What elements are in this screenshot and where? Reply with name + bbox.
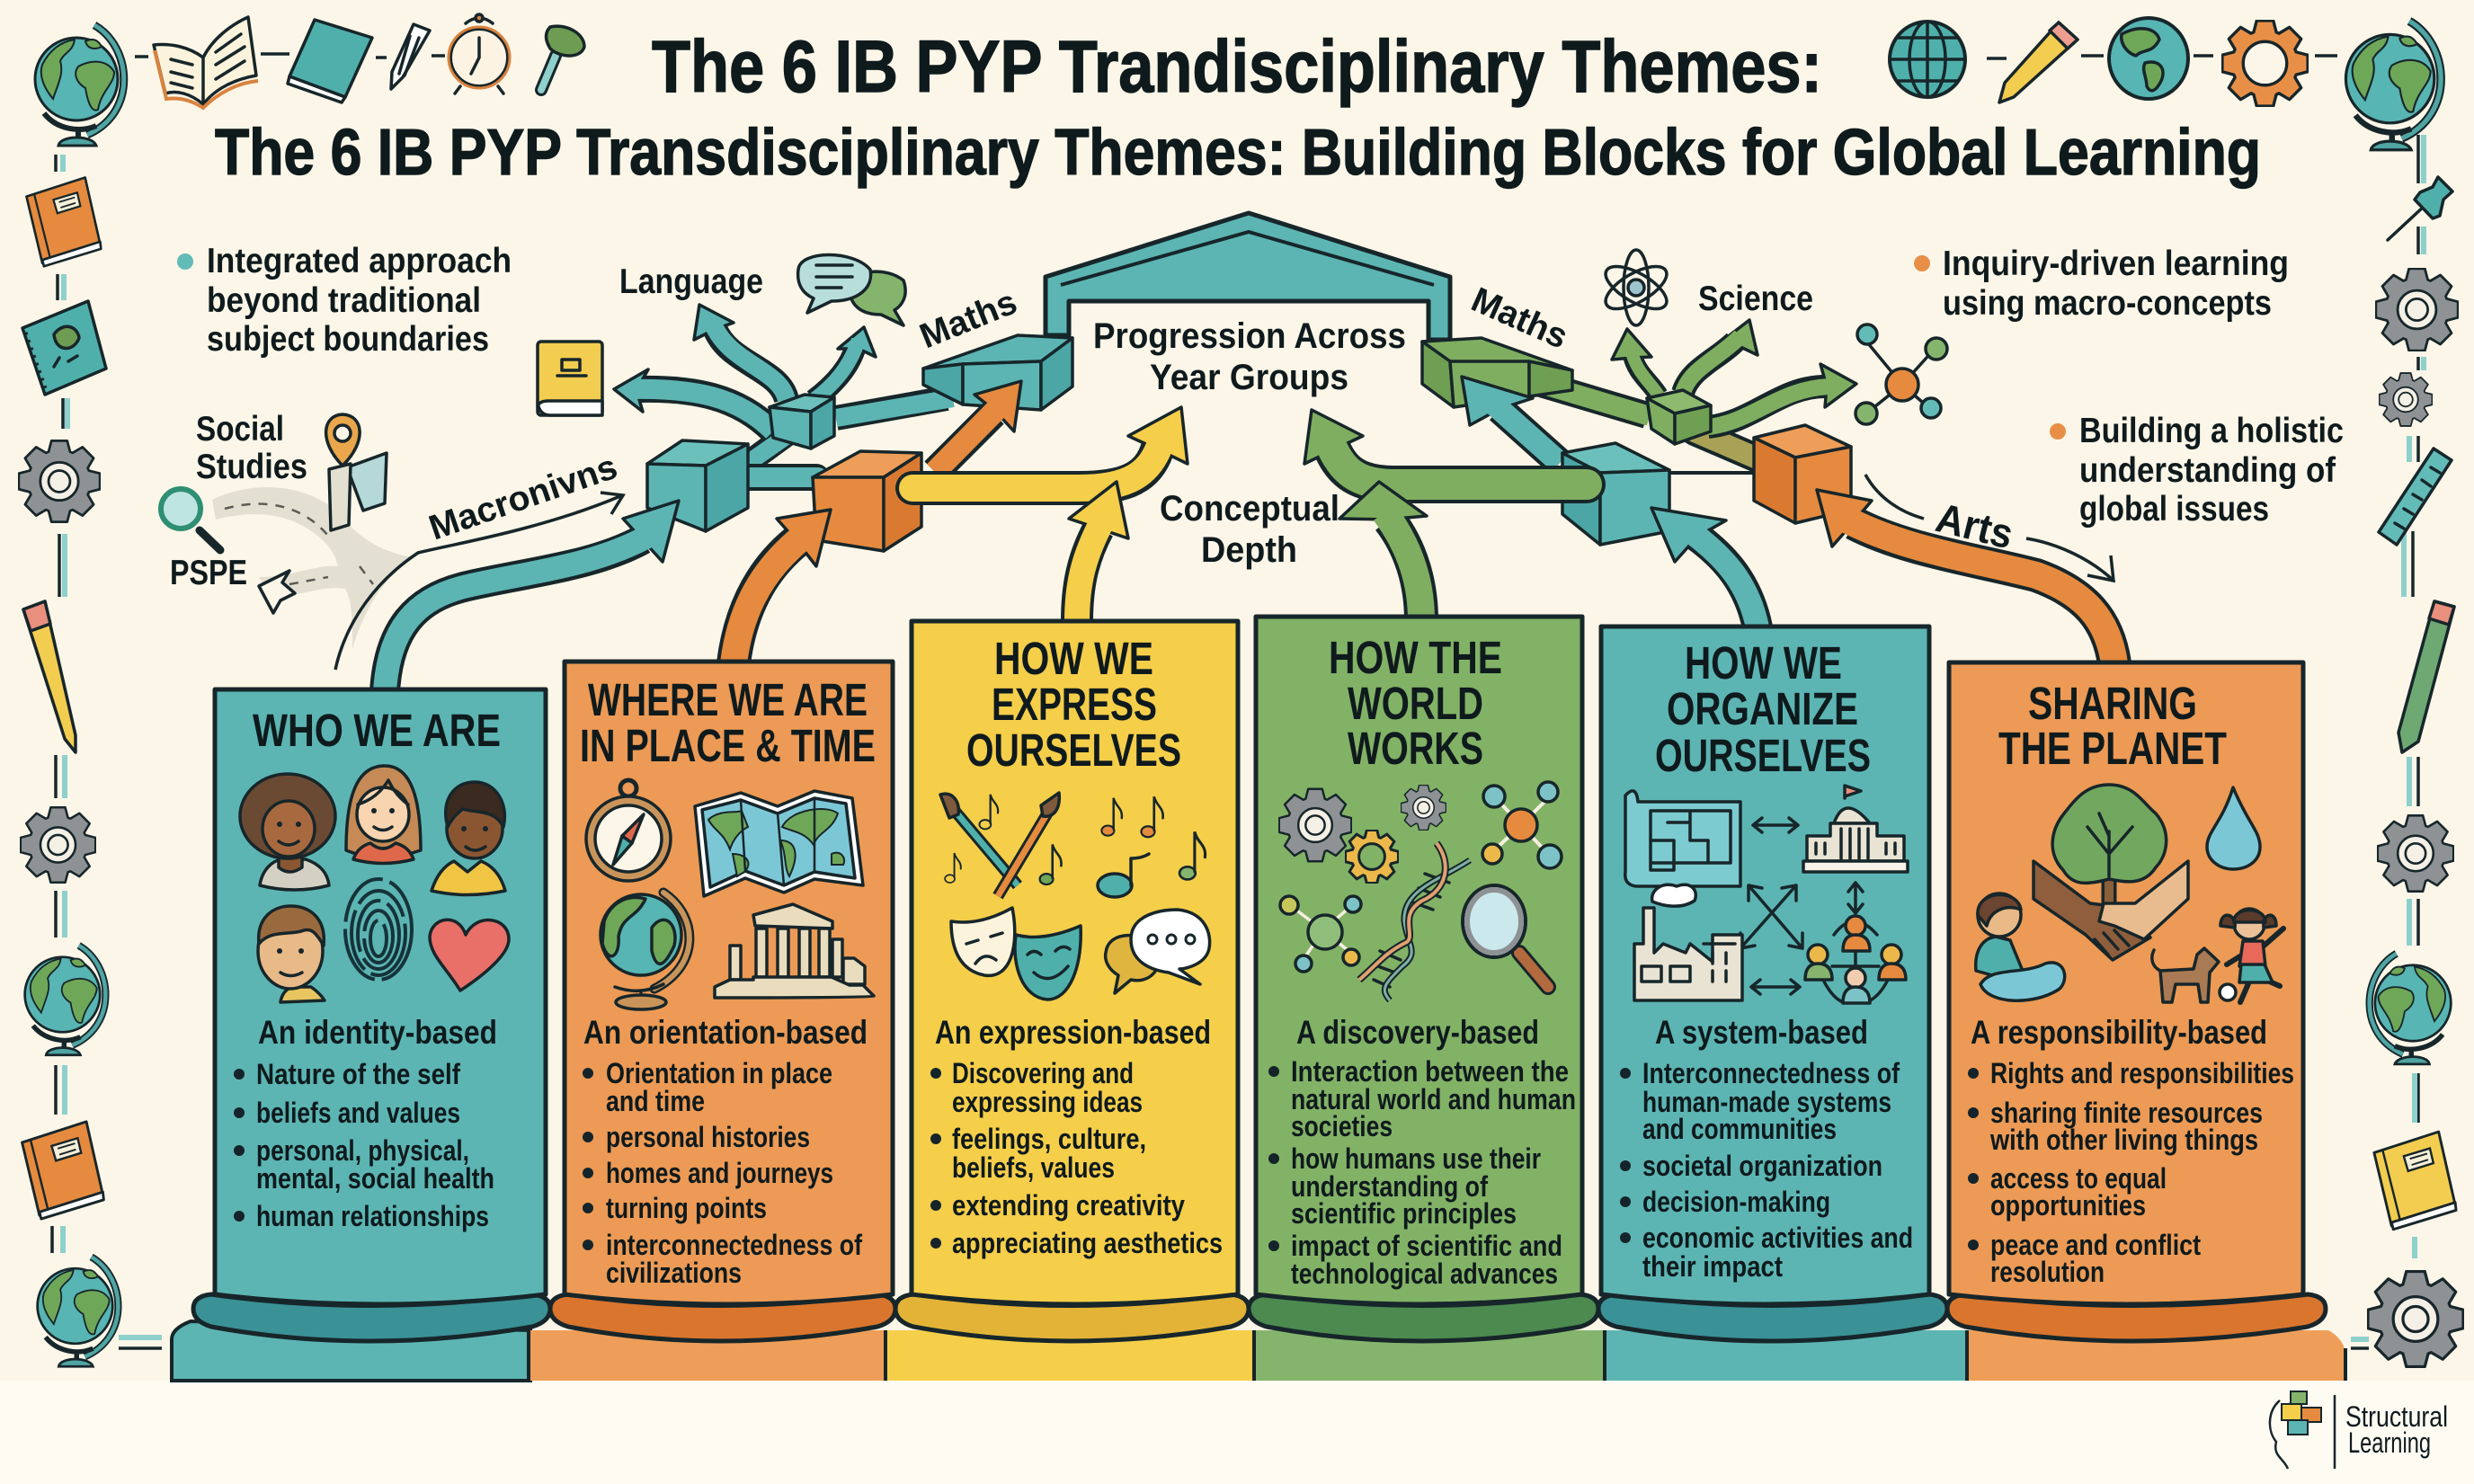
notes: integrated approach: beyond traditional [207, 281, 481, 320]
panel: how we express ourselves [912, 621, 1238, 1304]
notes: integrated approach [177, 242, 512, 359]
heading: THE PLANET [1998, 723, 2227, 774]
panel: where we are in place and time [565, 662, 893, 1304]
logo: structural learning: Learning [2348, 1426, 2431, 1459]
icon: earth [2109, 18, 2188, 99]
label: arts with thin arrow: Arts [1932, 493, 2018, 558]
heading: ORGANIZE [1667, 683, 1858, 734]
bullet list: peace and conflict [1990, 1229, 2201, 1261]
icon: globe [2370, 954, 2451, 1064]
base: pedestals [172, 1321, 2345, 1381]
icon: orange molecule [1482, 782, 1562, 868]
label: maths right: Maths [1465, 280, 1573, 357]
bullet list: Nature of the self [256, 1058, 460, 1090]
icon: gear [2378, 815, 2453, 892]
icon: girl running [2220, 909, 2283, 1002]
icon: mesh globe [1890, 22, 1965, 97]
icon: desk globe [601, 893, 690, 1009]
icon: handshake [2033, 861, 2188, 960]
subheading: An identity-based [258, 1014, 497, 1051]
label: macronivns with thin arrow [335, 448, 623, 670]
bullet list: Interconnectedness of [1642, 1057, 1900, 1089]
bullet list: turning points [606, 1192, 767, 1224]
bullet list: interconnectedness of [606, 1229, 862, 1261]
bullet list [1620, 1057, 1913, 1283]
bullet list: and communities [1642, 1113, 1837, 1145]
bullet list: societies [1291, 1110, 1393, 1142]
bullet list: human-made systems [1642, 1086, 1891, 1118]
icon: dna helix [1359, 843, 1470, 1000]
block: orange cube [813, 451, 921, 551]
icon: factory [1634, 884, 1742, 1000]
icon: boy with brown hair [258, 906, 325, 1002]
bullet list: and time [606, 1085, 705, 1117]
block: small teal cube [770, 395, 834, 449]
bullet list: homes and journeys [606, 1157, 833, 1189]
subheading: A system-based [1655, 1014, 1868, 1051]
icon: orange gear [2222, 21, 2308, 106]
icon: tree [2052, 785, 2167, 908]
icon: green pencil [2398, 601, 2454, 752]
bullet list: Rights and responsibilities [1990, 1057, 2294, 1089]
left network bands [734, 398, 953, 477]
notes: inquiry-driven learning: using macro-concepts [1943, 284, 2272, 323]
notes: holistic understanding [2050, 412, 2344, 529]
heading: WORLD [1348, 678, 1483, 729]
heading [1655, 637, 1871, 781]
bullet list [583, 1057, 862, 1289]
block: maths left [923, 335, 1072, 410]
bullet list: expressing ideas [952, 1086, 1143, 1118]
road paths with social studies and PSPE: Social [196, 410, 284, 449]
icon: people network [1805, 916, 1906, 1003]
icon: world map [695, 791, 863, 896]
icon: music notes left [945, 795, 1062, 884]
label: progression across year groups [1093, 316, 1406, 397]
block: small green cube [1647, 390, 1711, 444]
notes: inquiry-driven learning [1914, 244, 2289, 323]
icon: small gear [1401, 785, 1446, 831]
icon: crossed paint brushes [940, 793, 1059, 896]
icon: gear [21, 807, 95, 883]
arrow: teal up [694, 305, 787, 400]
icon: teal book [288, 20, 372, 102]
subheading: An expression-based [935, 1014, 1211, 1051]
arrow: how we express yellow [1069, 482, 1128, 622]
bullet list [234, 1058, 494, 1232]
icon: white pencil [391, 24, 430, 89]
heading [580, 674, 876, 771]
heading: HOW WE [1685, 637, 1842, 689]
bullet list: opportunities [1990, 1189, 2146, 1222]
bullet list: economic activities and [1642, 1222, 1913, 1254]
label: conceptual depth: Conceptual [1160, 489, 1339, 529]
label: arts with thin arrow [1865, 475, 2114, 581]
label: language: Language [619, 262, 763, 301]
icon: boy with dark skin [432, 782, 505, 895]
arrow: yellow horizontal [912, 407, 1188, 488]
heading [1329, 632, 1502, 774]
title line 1: The 6 IB PYP Trandisciplinary Themes: [652, 26, 1822, 108]
label: macronivns with thin arrow: Macronivns [424, 448, 622, 548]
icon: globe top-right [2345, 21, 2441, 150]
bullet list: feelings, culture, [952, 1123, 1146, 1155]
bullet list [1968, 1057, 2294, 1288]
heading: WHO WE ARE [253, 705, 501, 756]
icon: dog and ball [2152, 948, 2236, 1002]
icon: orange book [22, 1122, 103, 1219]
bullet list: societal organization [1642, 1150, 1882, 1182]
notes: holistic understanding: understanding of [2079, 451, 2336, 490]
notes: integrated approach: subject boundaries [207, 320, 489, 359]
roof: progression arch [1046, 213, 1450, 340]
arrow: how we organize teal [1651, 508, 1758, 627]
arrow: green up right [1683, 320, 1758, 393]
heading: SHARING [2028, 678, 2197, 729]
notes: integrated approach: Integrated approach [207, 242, 512, 280]
bullet list: Discovering and [952, 1057, 1134, 1089]
road paths with social studies and PSPE [161, 410, 414, 649]
right border icons [2368, 177, 2463, 1367]
arrow: how the world works green [1339, 482, 1427, 620]
icon: compass [586, 780, 671, 881]
bullet list: beliefs, values [952, 1151, 1115, 1184]
icon: yellow book [538, 342, 602, 415]
bullet list: how humans use their [1291, 1142, 1541, 1175]
bullet list: extending creativity [952, 1189, 1185, 1222]
bullet list: personal histories [606, 1121, 810, 1153]
bullet list: beliefs and values [256, 1097, 460, 1129]
label: science: Science [1698, 280, 1813, 318]
icon: blueprint [1625, 791, 1740, 886]
heading: WHERE WE ARE [588, 674, 868, 725]
icon: fingerprint [345, 879, 412, 980]
icon: green molecule [1280, 896, 1361, 972]
icon: globe [25, 946, 105, 1055]
icon: orange book [26, 178, 101, 266]
panel: how we organize ourselves [1601, 626, 1929, 1304]
icon: gear [2376, 269, 2458, 351]
label: progression across year groups: Progression Across [1093, 316, 1406, 356]
icon: map pin and sign [326, 414, 387, 530]
icon: music notes right [1098, 796, 1206, 897]
heading: HOW THE [1329, 632, 1502, 683]
heading: EXPRESS [992, 679, 1157, 730]
icon: push pin [2388, 177, 2452, 240]
notes: holistic understanding: global issues [2079, 490, 2269, 529]
base: collars [193, 1294, 2326, 1341]
right network bands [1541, 384, 1766, 473]
heading [966, 633, 1181, 776]
icon: heart [430, 920, 509, 991]
icon: open book [154, 17, 258, 108]
bullet list: technological advances [1291, 1257, 1558, 1290]
icon: grey gear [1279, 789, 1351, 861]
block: green maths [1422, 338, 1572, 407]
bullet list: scientific principles [1291, 1197, 1517, 1230]
panel: sharing the planet [1949, 662, 2303, 1304]
icon: alarm clock [449, 14, 510, 93]
label: conceptual depth: Depth [1201, 530, 1297, 570]
bullet list: Orientation in place [606, 1057, 832, 1089]
bullet list: appreciating aesthetics [952, 1227, 1223, 1259]
arrow: green up left [1612, 329, 1659, 395]
label: progression across year groups: Year Groups [1150, 358, 1348, 397]
bullet list: their impact [1642, 1250, 1783, 1283]
bullet list [930, 1057, 1223, 1259]
bullet list: resolution [1990, 1256, 2105, 1288]
icon: PSPE arrow [259, 571, 295, 613]
arrow: green horizontal [1304, 410, 1587, 484]
bullet list [1268, 1055, 1576, 1290]
icon: boy washing in puddle [1976, 893, 2065, 1000]
heading: IN PLACE & TIME [580, 720, 876, 771]
icon: girl with afro [240, 774, 335, 890]
subheading: A discovery-based [1296, 1014, 1539, 1051]
footer strip [0, 1381, 2474, 1484]
icon: atom [1599, 250, 1673, 325]
arrow: who we are teal [385, 501, 679, 692]
icon: capitol building [1803, 786, 1908, 872]
icon: yellow book [2374, 1132, 2456, 1230]
icon: speech bubbles [798, 255, 905, 325]
arrow: green right [1708, 364, 1856, 427]
bullet list: understanding of [1291, 1170, 1488, 1203]
road paths with social studies and PSPE: PSPE [170, 554, 247, 592]
bullet list: civilizations [606, 1257, 742, 1289]
block: orange right [1754, 425, 1851, 523]
subheading: A responsibility-based [1971, 1014, 2267, 1051]
icon: small gear [2380, 373, 2432, 426]
block: medium teal cube [647, 440, 748, 531]
heading: OURSELVES [966, 724, 1181, 776]
icon: system arrows [1740, 818, 1863, 994]
heading: OURSELVES [1655, 730, 1871, 781]
notes: inquiry-driven learning: Inquiry-driven learning [1943, 244, 2289, 283]
arrow: teal to book [614, 369, 773, 431]
icon: yellow pencil [23, 601, 76, 752]
logo: structural learning: Structural [2345, 1400, 2448, 1433]
heading: WORKS [1348, 723, 1483, 774]
panel: who we are [215, 689, 546, 1304]
icon: girl with long hair [346, 766, 421, 863]
icon: green notebook [22, 301, 106, 395]
icon: gear [2368, 1271, 2463, 1367]
bullet list: Interaction between the [1291, 1055, 1569, 1088]
label: maths left: Maths [914, 283, 1022, 356]
icon: ruler [2379, 449, 2452, 545]
arrow: orange from cube to maths block [935, 381, 1021, 472]
subheading: An orientation-based [583, 1014, 868, 1051]
bullet list: decision-making [1642, 1186, 1830, 1218]
icon: theatre masks [951, 908, 1081, 1000]
arrow: sharing the planet orange [1817, 490, 2114, 663]
icon: magnifying glass [1463, 885, 1548, 987]
icon: water drop [2207, 787, 2260, 869]
icon: yellow gear [1346, 831, 1398, 883]
icon: globe top-left [35, 25, 124, 146]
icon: molecule [1856, 324, 1947, 424]
arrow: teal block to green block [1462, 377, 1560, 463]
arrow: where we are orange [734, 510, 831, 663]
bullet list: mental, social health [256, 1162, 494, 1195]
bullet list: with other living things [1989, 1124, 2258, 1156]
road paths with social studies and PSPE: Studies [196, 448, 307, 486]
heading: HOW WE [994, 633, 1153, 684]
bullet list: personal, physical, [256, 1134, 469, 1167]
icon: globe [38, 1257, 118, 1366]
label: conceptual depth [1160, 489, 1339, 570]
block: teal right [1562, 443, 1669, 545]
left border icons [19, 178, 118, 1366]
logo: structural learning [2270, 1391, 2448, 1469]
bullet list: sharing finite resources [1990, 1097, 2263, 1129]
icon: hammer tool [541, 26, 584, 90]
bullet list: impact of scientific and [1291, 1230, 1562, 1262]
icon: yellow pencil [1999, 22, 2078, 102]
icon: speech bubbles [1106, 910, 1210, 993]
icon: greek temple [715, 904, 874, 998]
arrow: teal up right [814, 327, 876, 400]
panel: how the world works [1256, 617, 1582, 1304]
icon: gear [19, 440, 100, 522]
bullet list: access to equal [1990, 1162, 2167, 1195]
notes: holistic understanding: Building a holistic [2079, 412, 2344, 450]
bullet list: natural world and human [1291, 1083, 1576, 1115]
heading [1998, 678, 2227, 774]
icon: magnifier [161, 489, 220, 550]
bullet list: human relationships [256, 1200, 489, 1232]
